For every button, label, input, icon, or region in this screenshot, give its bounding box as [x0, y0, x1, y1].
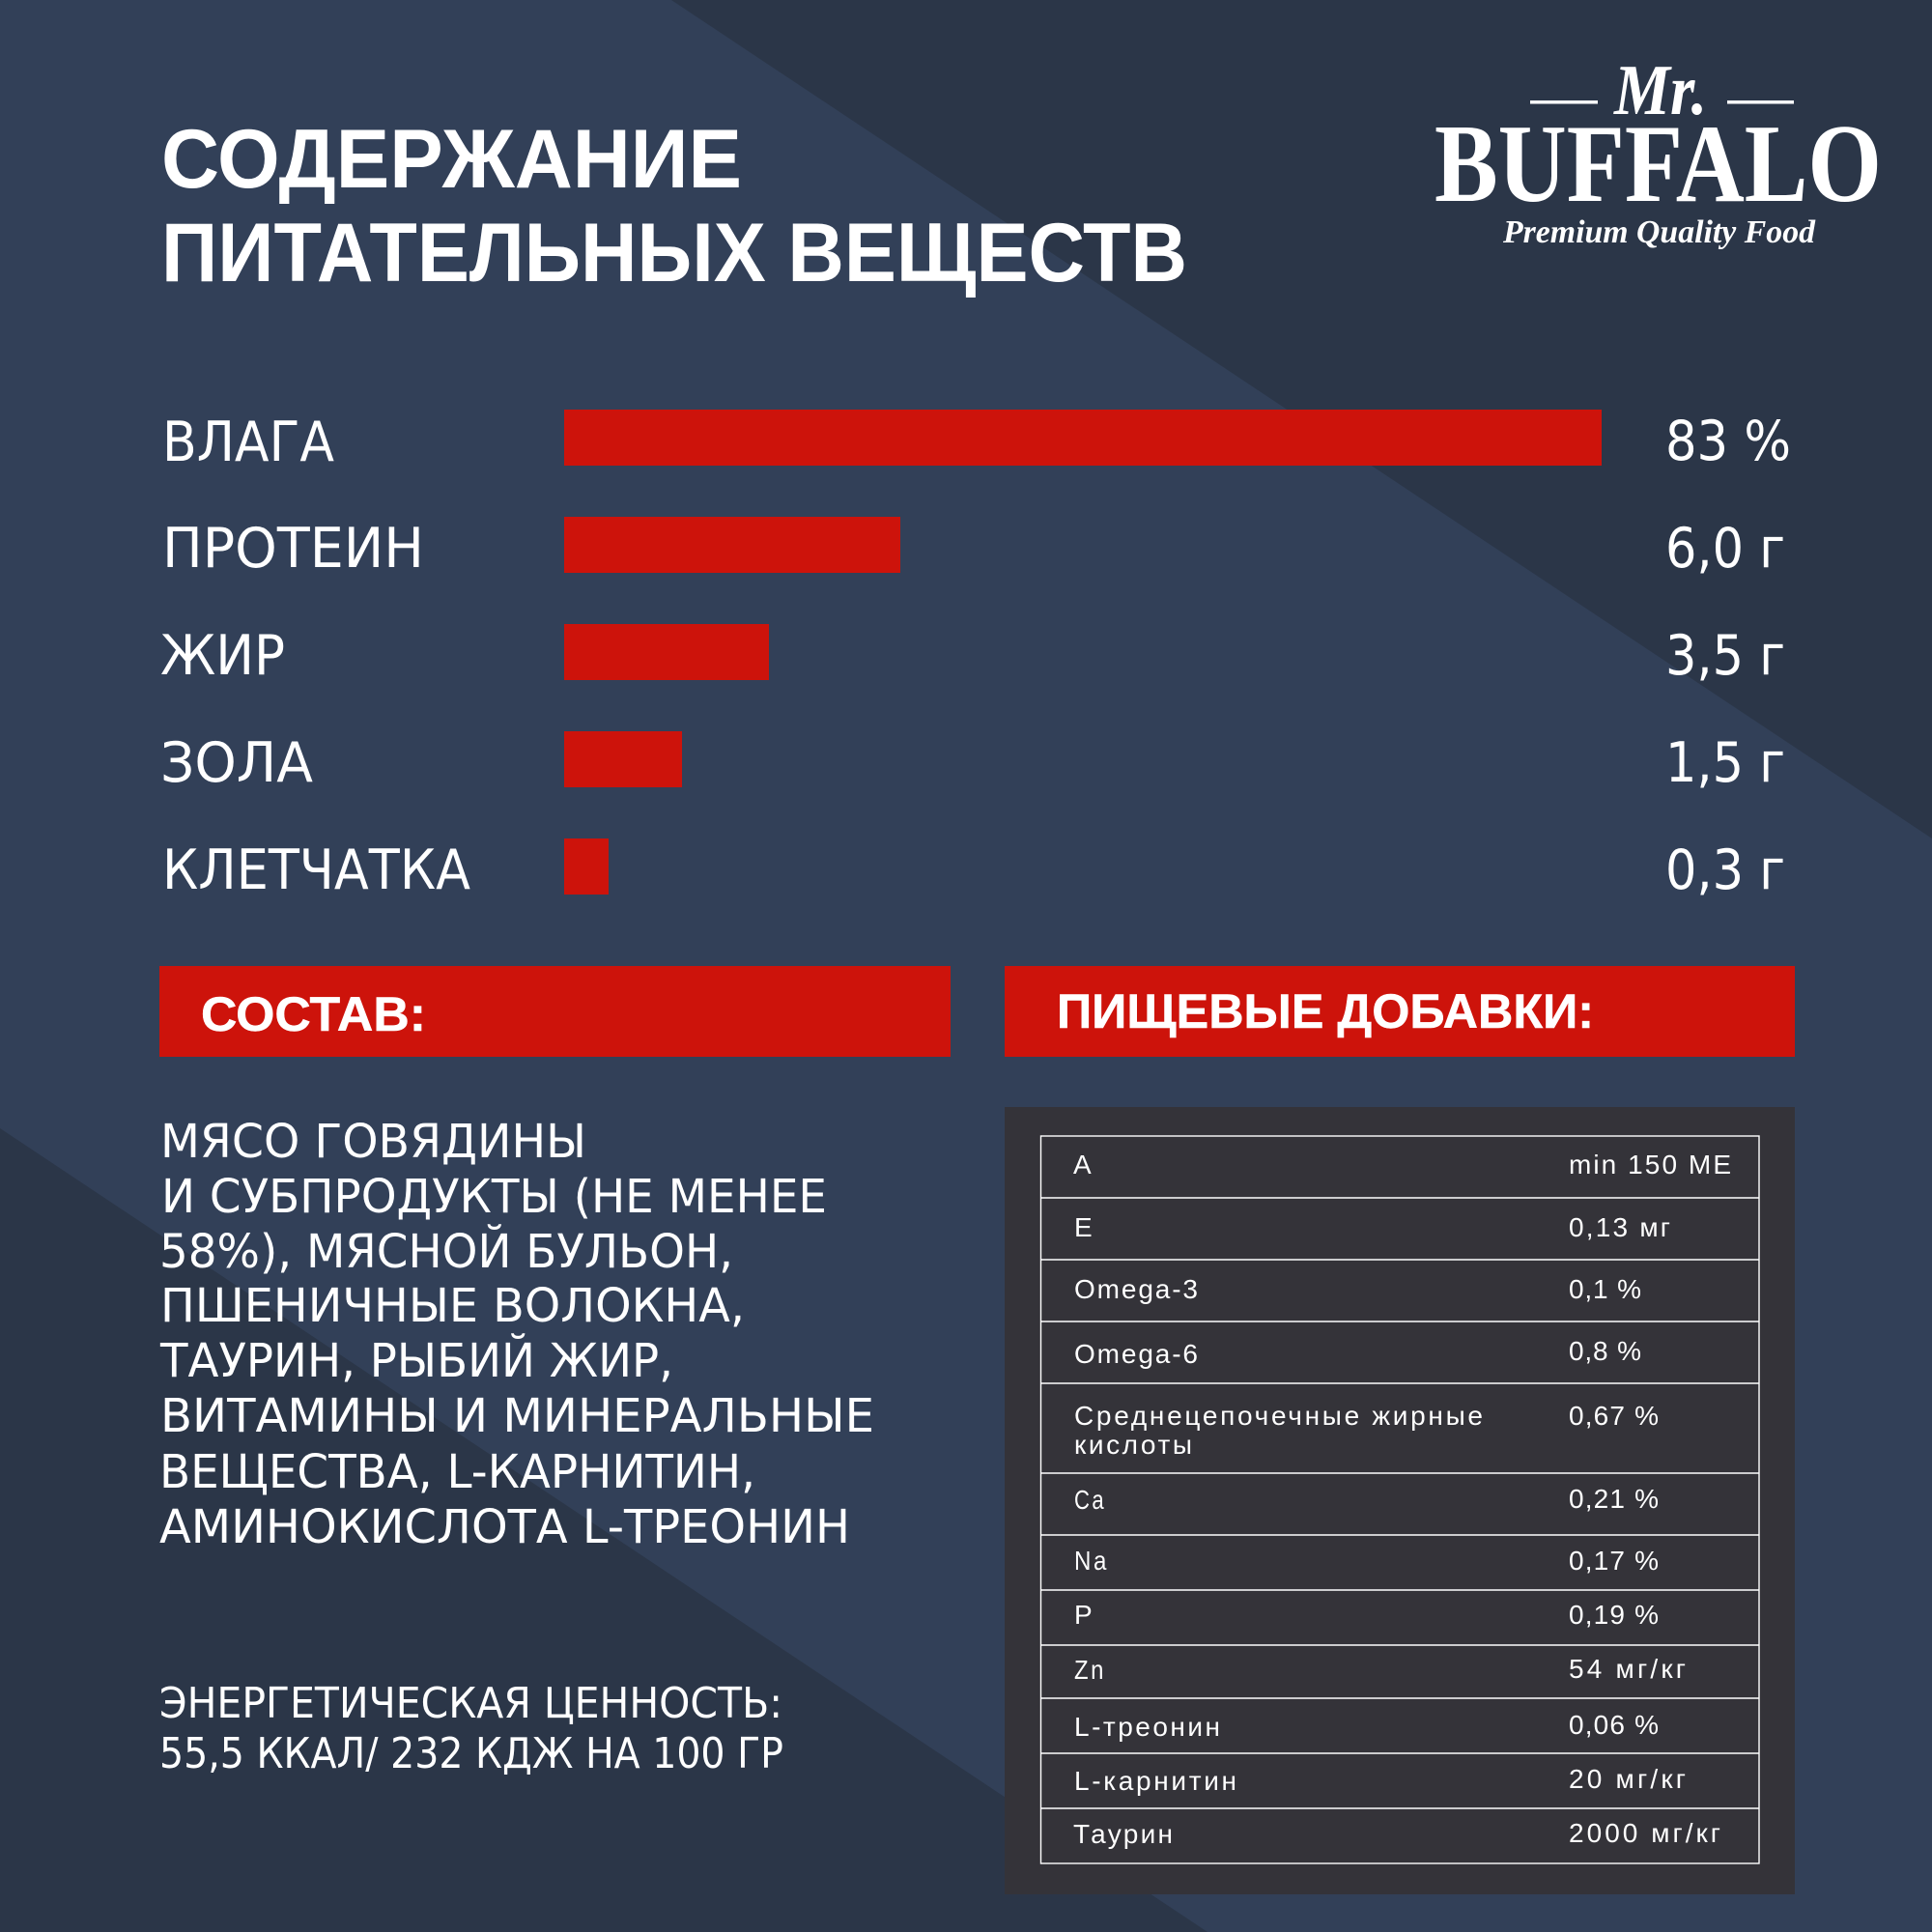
row: protein	[162, 517, 1785, 581]
table row: vitamin A: A	[1073, 1150, 1092, 1179]
table row: carnitine	[1074, 1764, 1686, 1796]
table row: phosphorus: P	[1074, 1600, 1093, 1630]
composition text	[159, 1115, 874, 1554]
row: fat: ЖИР	[160, 624, 285, 688]
row: fibre: КЛЕТЧАТКА	[162, 838, 470, 902]
table row: sodium: Na	[1074, 1546, 1109, 1576]
table row: carnitine: 20 мг/кг	[1569, 1764, 1686, 1794]
table row: calcium: Ca	[1074, 1485, 1106, 1515]
title: ПИТАТЕЛЬНЫХ ВЕЩЕСТВ	[161, 207, 1187, 299]
composition text: ПШЕНИЧНЫЕ ВОЛОКНА,	[160, 1279, 745, 1333]
table row: omega-6: Omega-6	[1074, 1339, 1198, 1369]
table row: zinc	[1074, 1654, 1686, 1685]
table row: calcium	[1074, 1484, 1659, 1515]
logo: Mr. Buffalo: Mr.	[1613, 51, 1707, 130]
composition text: 58%), МЯСНОЙ БУЛЬОН,	[159, 1224, 733, 1279]
additives panel	[1005, 1107, 1795, 1894]
row: moisture: 83 %	[1665, 410, 1791, 473]
table row: omega-3: 0,1 %	[1569, 1274, 1641, 1304]
row: ash: 1,5 г	[1665, 731, 1785, 795]
heading band: composition: СОСТАВ:	[201, 987, 426, 1041]
table row: vitamin E: 0,13 мг	[1569, 1212, 1670, 1242]
row: ash	[160, 731, 1785, 795]
row: moisture: ВЛАГА	[162, 411, 334, 474]
composition text: АМИНОКИСЛОТА L-ТРЕОНИН	[159, 1500, 850, 1554]
composition text: МЯСО ГОВЯДИНЫ	[160, 1115, 586, 1169]
table row: omega-6: 0,8 %	[1569, 1336, 1641, 1366]
table row: vitamin E: E	[1074, 1212, 1093, 1242]
table row: sodium	[1074, 1546, 1659, 1576]
table row: phosphorus: 0,19 %	[1569, 1600, 1659, 1630]
table row: carnitine: L-карнитин	[1074, 1766, 1236, 1796]
row: fat	[160, 624, 1785, 688]
heading band: composition	[159, 966, 951, 1057]
row: moisture	[162, 410, 1791, 474]
title: СОДЕРЖАНИЕ	[161, 113, 742, 206]
table row: taurine: 2000 мг/кг	[1569, 1818, 1720, 1848]
table row: MCT: Среднецепочечные жирные	[1074, 1401, 1483, 1431]
energy value text: ЭНЕРГЕТИЧЕСКАЯ ЦЕННОСТЬ:	[159, 1679, 782, 1728]
heading band: additives: ПИЩЕВЫЕ ДОБАВКИ:	[1057, 984, 1594, 1038]
table row: threonine	[1074, 1710, 1659, 1742]
table row: phosphorus	[1074, 1600, 1659, 1630]
nutrient bar chart	[160, 410, 1791, 902]
table row: sodium: 0,17 %	[1569, 1546, 1659, 1576]
row: fibre: 0,3 г	[1665, 838, 1785, 902]
composition text: И СУБПРОДУКТЫ (НЕ МЕНЕЕ	[161, 1170, 827, 1224]
row: protein: 6,0 г	[1665, 517, 1785, 581]
row: protein: ПРОТЕИН	[162, 517, 424, 581]
row: ash: ЗОЛА	[160, 731, 313, 795]
row: fat: 3,5 г	[1665, 624, 1785, 688]
table row: taurine	[1073, 1818, 1720, 1849]
table row: calcium: 0,21 %	[1569, 1484, 1659, 1514]
composition text: ВЕЩЕСТВА, L-КАРНИТИН,	[159, 1445, 755, 1499]
energy value text: 55,5 ККАЛ/ 232 КДЖ НА 100 ГР	[159, 1729, 783, 1778]
title	[161, 113, 1187, 299]
heading band: additives	[1005, 966, 1795, 1057]
energy value text	[159, 1679, 783, 1778]
table row: threonine: 0,06 %	[1569, 1710, 1659, 1740]
table row: omega-3: Omega-3	[1074, 1274, 1198, 1304]
table row: MCT	[1074, 1401, 1659, 1460]
table row: zinc: 54 мг/кг	[1569, 1654, 1686, 1684]
logo: Mr. Buffalo	[1435, 51, 1882, 250]
table row: vitamin E	[1074, 1212, 1670, 1242]
table row: omega-6	[1074, 1336, 1641, 1369]
row: fibre	[162, 838, 1785, 902]
logo: Mr. Buffalo: Premium Quality Food	[1502, 214, 1816, 250]
composition text: ВИТАМИНЫ И МИНЕРАЛЬНЫЕ	[160, 1389, 874, 1443]
table row: MCT: 0,67 %	[1569, 1401, 1659, 1431]
table row: omega-3	[1074, 1274, 1641, 1304]
table row: vitamin A: min 150 МЕ	[1569, 1150, 1731, 1179]
table row: MCT: кислоты	[1074, 1430, 1192, 1460]
table row: threonine: L-треонин	[1074, 1712, 1220, 1742]
table row: vitamin A	[1073, 1150, 1731, 1179]
composition text: ТАУРИН, РЫБИЙ ЖИР,	[159, 1333, 673, 1388]
table row: zinc: Zn	[1074, 1655, 1106, 1685]
table row: taurine: Таурин	[1073, 1819, 1173, 1849]
